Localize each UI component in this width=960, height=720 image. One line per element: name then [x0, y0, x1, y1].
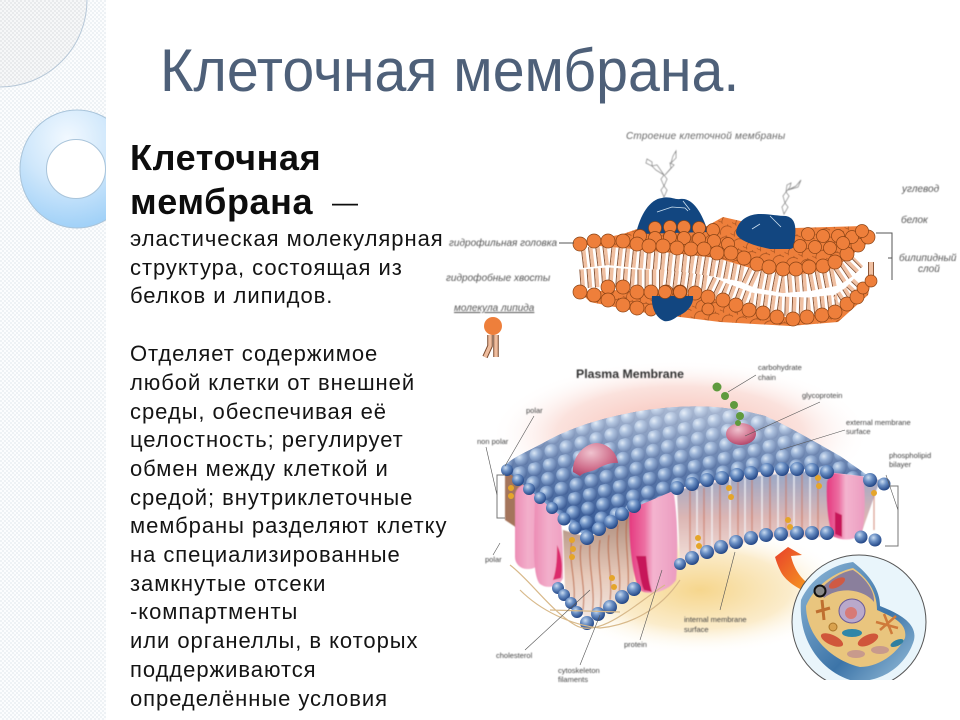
heading: Plasma Membrane: Plasma Membrane [576, 367, 684, 381]
protein: lower [652, 296, 693, 321]
diagram title: Строение клеточной мембраны [626, 130, 786, 142]
labels: plasma membrane: internal membrane [684, 615, 747, 624]
text block: definition [130, 137, 447, 711]
labels: structure diagram: углевод [901, 184, 940, 195]
carbohydrate chain [712, 382, 744, 426]
upper lipid heads [573, 220, 875, 276]
icon: lipid molecule [484, 317, 502, 357]
labels: structure diagram: белок [901, 214, 929, 226]
text block: definition: — [332, 187, 358, 217]
labels: structure diagram: молекула липида [454, 303, 535, 314]
text block: definition: поддерживаются [130, 657, 317, 682]
labels: plasma membrane: surface [846, 427, 871, 436]
labels: plasma membrane: bilayer [889, 460, 912, 469]
leader lines [486, 375, 898, 665]
protein: dome left [636, 197, 708, 234]
cytoskeleton filaments [510, 565, 680, 628]
labels: plasma membrane: phospholipid [889, 451, 931, 460]
labels: plasma membrane [477, 363, 931, 684]
text block: definition: мембраны разделяют клетку [130, 513, 447, 538]
labels: plasma membrane: polar [485, 555, 502, 564]
labels: plasma membrane: non polar [477, 437, 509, 446]
labels: plasma membrane: glycoprotein [802, 391, 842, 400]
left decorative strip [0, 0, 106, 720]
bracket lines [497, 475, 898, 546]
labels: structure diagram: гидрофильная головка [449, 237, 557, 249]
text block: definition: Отделяет содержимое [130, 341, 378, 366]
labels: structure diagram [446, 184, 957, 314]
labels: plasma membrane: carbohydrate [758, 363, 802, 372]
glycoprotein and dome protein [726, 423, 756, 445]
text block: definition: Клеточная [130, 137, 321, 178]
lower edge spheres [552, 526, 882, 630]
labels: plasma membrane: filaments [558, 675, 588, 684]
diagram: membrane structure (orange) [446, 131, 957, 683]
lower lipid heads [573, 275, 877, 326]
text block: definition: среды, обеспечивая её [130, 399, 387, 424]
labels: plasma membrane: cholesterol [496, 651, 533, 660]
labels: plasma membrane: cytoskeleton [558, 666, 600, 675]
inset: cell [792, 555, 926, 689]
front edge spheres [501, 462, 890, 545]
labels: structure diagram: гидрофобные хвосты [446, 272, 551, 284]
text block: definition: любой клетки от внешней [130, 370, 415, 395]
text block: definition: замкнутые отсеки [130, 571, 326, 596]
text block: definition: мембрана [130, 181, 313, 222]
text block: definition: эластическая молекулярная [130, 226, 444, 251]
background glows [490, 360, 870, 510]
labels: structure diagram: билипидный [899, 252, 957, 264]
text block: definition: или органеллы, в которых [130, 628, 418, 653]
text block: definition: на специализированные [130, 542, 401, 567]
title: Клеточная мембрана. [160, 37, 739, 104]
text block: definition: средой; внутриклеточные [130, 485, 413, 510]
top surface: spheres [503, 406, 870, 538]
lipid tails [580, 255, 871, 307]
labels: plasma membrane: surface [684, 625, 709, 634]
proteins: pink channels [515, 468, 865, 593]
diagram: plasma membrane [477, 360, 931, 689]
protein: dome right [736, 214, 795, 249]
labels: structure diagram: слой [918, 264, 940, 275]
text block: definition: определённые условия [130, 686, 388, 711]
text block: definition: белков и липидов. [130, 283, 333, 308]
cholesterol [508, 475, 877, 590]
label leader and bracket [559, 233, 892, 280]
upper lipid layer surface [575, 217, 875, 275]
text block: definition: структура, состоящая из [130, 255, 403, 280]
labels: plasma membrane: protein [624, 640, 647, 649]
text block: definition: -компартменты [130, 599, 298, 624]
side wall: lipid tails [505, 470, 880, 620]
labels: plasma membrane: chain [758, 373, 776, 382]
labels: plasma membrane: polar [526, 406, 543, 415]
carbohydrate chains [646, 151, 801, 214]
text block: definition: обмен между клеткой и [130, 456, 389, 481]
arrow [775, 547, 814, 594]
text block: definition: целостность; регулирует [130, 427, 404, 452]
labels: plasma membrane: external membrane [846, 418, 911, 427]
